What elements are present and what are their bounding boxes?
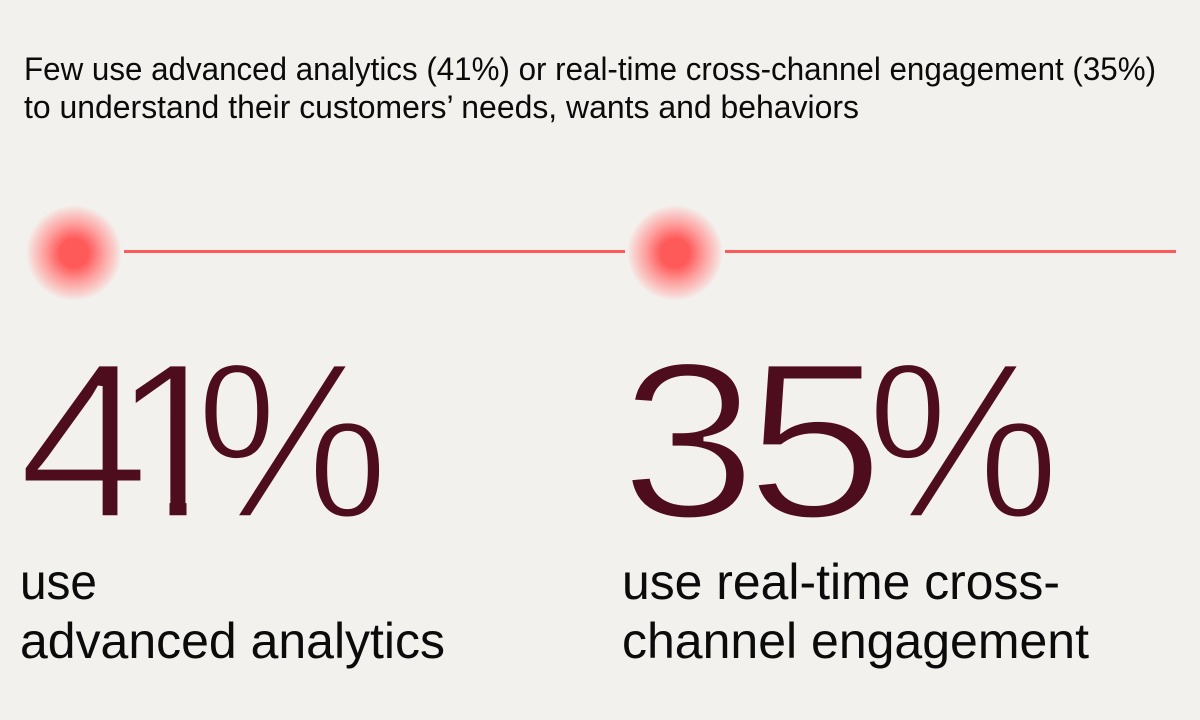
label: real-time cross-channel engagement: channel engagement [622,613,1089,669]
stat: 35%: % [866,316,1060,566]
stat: 35%: 5 [746,316,884,566]
stat: 41%: % [195,316,389,566]
title [24,51,1156,125]
label: real-time cross-channel engagement [622,554,1089,669]
stat: 41% [18,316,389,566]
label: advanced analytics: use [20,554,97,610]
label: advanced analytics [20,554,445,669]
stat: 41%: 4 [18,316,150,566]
title: Few use advanced analytics (41%) or real-time cross-channel engagement (35%) [24,51,1156,87]
icon: glowing marker 35% [627,205,723,301]
stat: 35%: 3 [620,316,757,566]
stat: 41%: 1 [112,316,236,566]
label: real-time cross-channel engagement: use real-time cross- [622,554,1060,610]
label: advanced analytics: advanced analytics [20,613,445,669]
icon: glowing marker 41% [26,205,122,301]
stat: 35% [620,316,1060,566]
title: to understand their customers’ needs, wants and behaviors [24,89,859,125]
timeline connector line [124,250,1176,253]
